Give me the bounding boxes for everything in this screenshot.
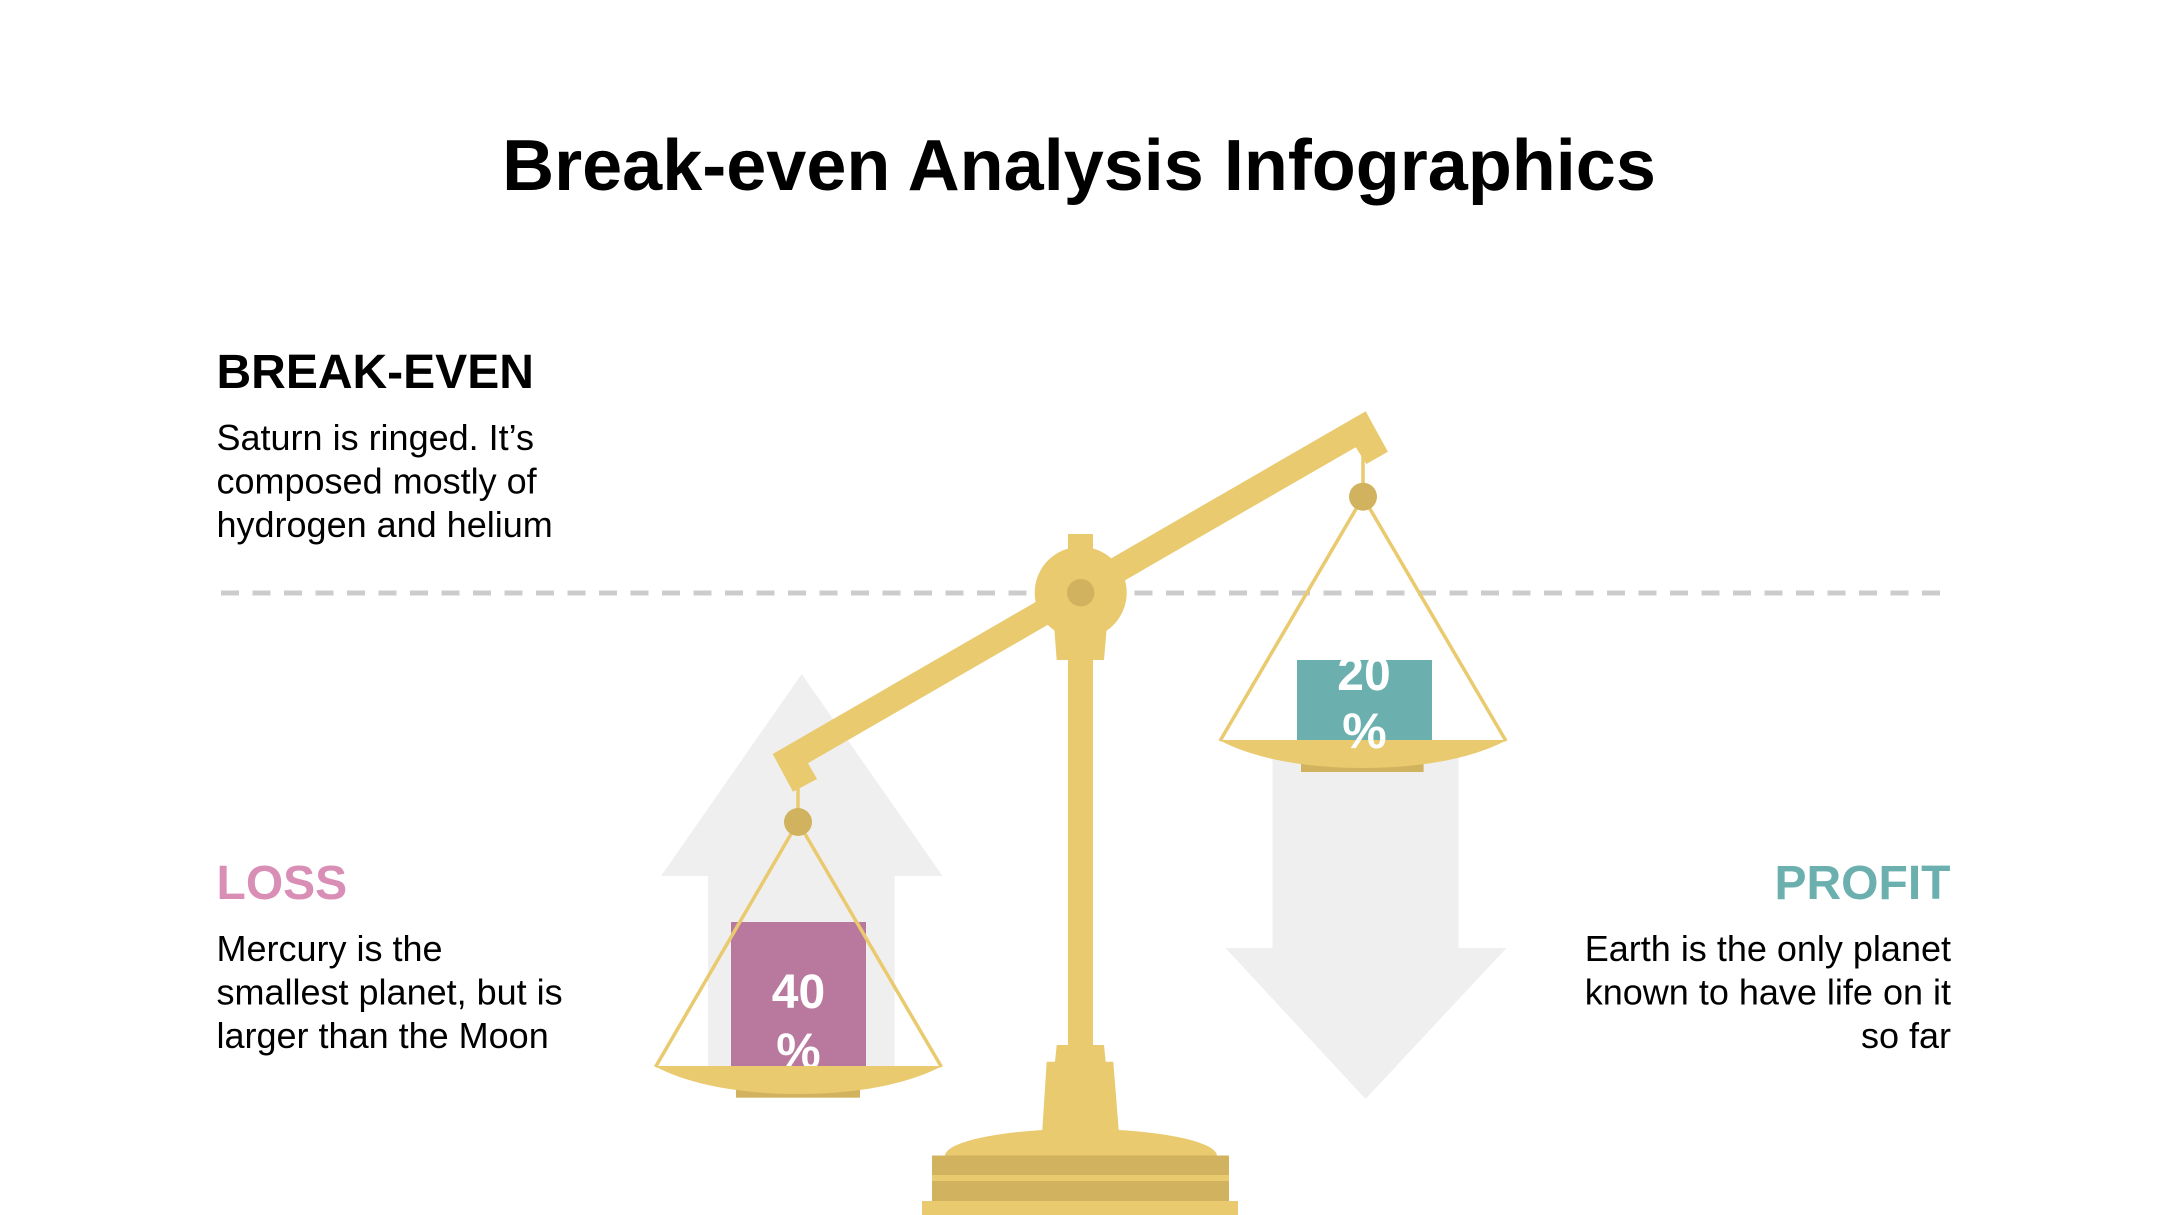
- title: Break-even Analysis Infographics: [502, 126, 1656, 206]
- box: loss 40%: %: [776, 1023, 821, 1079]
- text block: loss: smallest planet, but is: [216, 971, 563, 1012]
- text block: profit: known to have life on it: [1585, 971, 1951, 1012]
- text block: break-even: [216, 346, 553, 545]
- box: loss 40%: [731, 922, 866, 1079]
- text block: profit: Earth is the only planet: [1585, 928, 1951, 969]
- right pan assembly: [1219, 448, 1507, 772]
- text block: profit: PROFIT: [1774, 857, 1950, 910]
- text block: profit: so far: [1861, 1015, 1951, 1056]
- arrow: up: [661, 674, 942, 1070]
- text block: loss: larger than the Moon: [216, 1015, 549, 1056]
- box: loss 40%: 40: [772, 966, 825, 1019]
- text block: profit: [1585, 857, 1951, 1056]
- scale: pivot: [1035, 547, 1127, 660]
- text block: loss: Mercury is the: [216, 928, 443, 969]
- text block: break-even: composed mostly of: [216, 460, 538, 501]
- text block: break-even: BREAK-EVEN: [216, 346, 534, 399]
- text block: break-even: hydrogen and helium: [216, 504, 553, 545]
- scale: tilted beam: [773, 411, 1388, 792]
- scale: central post and base: [922, 534, 1238, 1215]
- arrow: down: [1226, 750, 1506, 1099]
- text block: loss: [216, 857, 563, 1056]
- label: 20%: [1337, 648, 1391, 759]
- label: 20%: 20: [1337, 648, 1391, 701]
- box: profit 20%: [1297, 660, 1432, 740]
- label: 20%: %: [1342, 703, 1387, 759]
- text block: loss: LOSS: [216, 857, 347, 910]
- text block: break-even: Saturn is ringed. It’s: [216, 417, 534, 458]
- left pan assembly: [654, 785, 942, 1098]
